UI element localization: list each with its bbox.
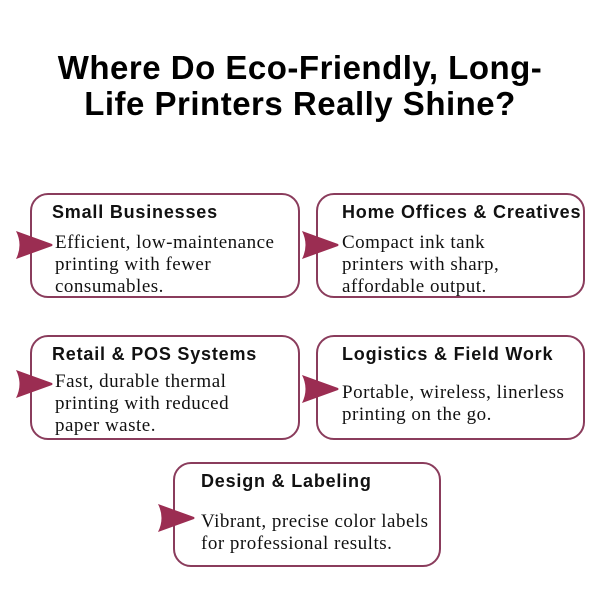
text: retail: printing with reduced [55,393,229,414]
text: design: for professional results. [201,533,392,554]
text: logistics [342,382,564,425]
panel: home offices [316,193,585,298]
text: logistics: printing on the go. [342,404,492,425]
title: Where Do Eco-Friendly, Long- [58,49,542,86]
icon: arrow 2 [302,231,338,259]
text: retail: Fast, durable thermal [55,371,226,392]
title: Life Printers Really Shine? [84,85,516,122]
text: small businesses: Efficient, low-maintenance [55,232,274,253]
text: retail [55,371,229,436]
text: small businesses [55,232,274,297]
heading: retail: Retail & POS Systems [52,344,257,364]
icon: arrow 4 [302,375,338,403]
text: home offices: Compact ink tank [342,232,485,253]
heading: small businesses: Small Businesses [52,202,218,222]
text: design: Vibrant, precise color labels [201,511,429,532]
icon: arrow 5 [158,504,194,532]
icon: arrow 1 [16,231,52,259]
panel: retail [30,335,300,440]
heading: logistics: Logistics & Field Work [342,344,553,364]
panel: design [173,462,441,567]
text: logistics: Portable, wireless, linerless [342,382,564,403]
text: retail: paper waste. [55,415,156,436]
text: small businesses: consumables. [55,276,164,297]
text: home offices: printers with sharp, [342,254,499,275]
heading: home offices: Home Offices & Creatives [342,202,581,222]
text: home offices [342,232,499,297]
panel: small businesses [30,193,300,298]
title [58,49,542,122]
text: home offices: affordable output. [342,276,487,297]
heading: design: Design & Labeling [201,471,372,491]
text: design [201,511,429,554]
text: small businesses: printing with fewer [55,254,211,275]
panel: logistics [316,335,585,440]
icon: arrow 3 [16,370,52,398]
